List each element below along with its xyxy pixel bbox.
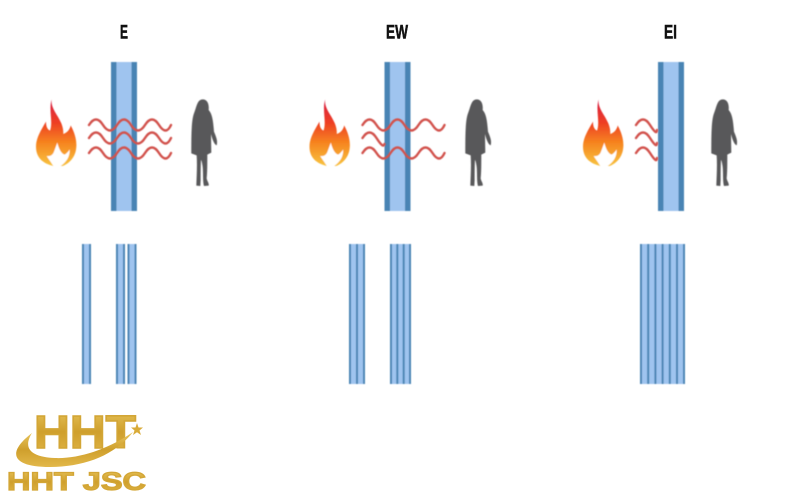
icon: flame [583, 99, 623, 166]
heading: EW: EW [386, 22, 408, 44]
heading: EI: EI [664, 22, 677, 44]
panel: EI class [583, 22, 737, 384]
logo: HHT JSC [7, 406, 146, 496]
logo wordmark: HHT JSC [7, 468, 146, 496]
glass pane: E [111, 62, 137, 211]
panel: E class [36, 22, 217, 384]
panel: EW class [309, 22, 491, 384]
icon: flame [36, 99, 76, 166]
glass pane: EI [658, 62, 684, 211]
glazing section diagram: EW [349, 244, 411, 384]
heading: E: E [120, 22, 128, 44]
icon: person silhouette [711, 99, 737, 186]
logo monogram: HHT: HHT [34, 406, 136, 458]
glass pane: EW [384, 62, 410, 211]
heat waves passing through glass [89, 120, 171, 158]
logo swoosh [16, 432, 133, 467]
glazing section diagram: EI [640, 244, 685, 384]
heat waves partly reduced [362, 120, 444, 158]
heat waves blocked at glass [636, 120, 657, 160]
glazing section diagram: E [82, 244, 136, 384]
icon: flame [309, 99, 350, 166]
logo star [131, 423, 143, 435]
icon: person silhouette [191, 99, 217, 186]
icon: person silhouette [465, 99, 491, 186]
